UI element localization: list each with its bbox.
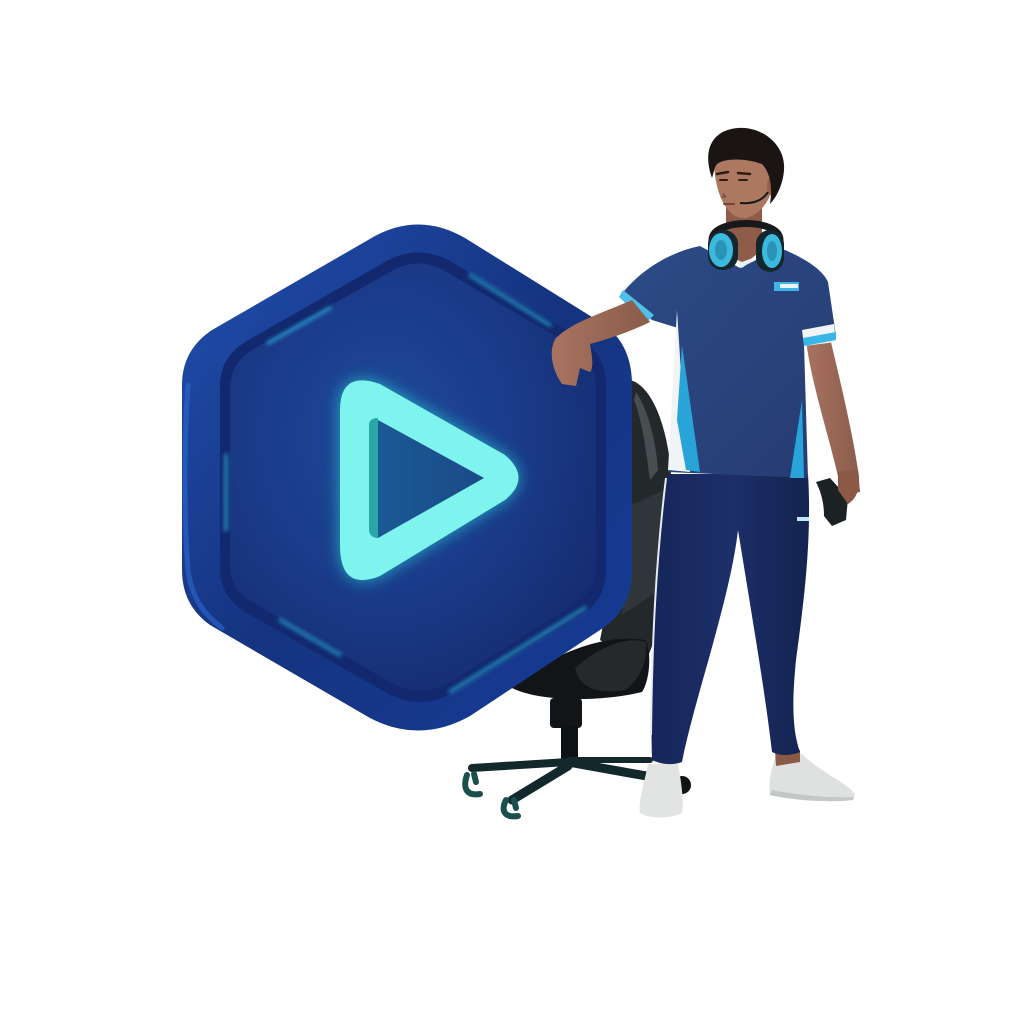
trousers [651,474,809,764]
back arm [806,338,860,496]
icon: play triangle [340,380,518,580]
chair backrest [600,380,671,668]
jersey side panels [668,310,690,472]
head [714,148,776,218]
badge inner face [230,263,596,691]
controller hand [838,470,859,504]
chair base and casters [472,760,680,800]
badge: hexagon play button [182,224,632,731]
ear [767,177,775,195]
game controller [816,478,848,526]
left shoe [640,764,683,818]
right shoe [769,754,855,801]
badge inner recess [220,252,606,702]
person: standing gamer [552,128,860,818]
headset mic [740,192,768,203]
badge edge highlights [226,275,585,692]
face features [717,172,750,204]
office chair [465,380,691,816]
chair seat [512,639,649,699]
ankles [775,750,800,766]
trouser logo [797,517,809,521]
jersey [620,246,836,478]
neck [726,200,762,266]
headphones [708,224,784,272]
collar [733,256,758,268]
hair [708,128,784,204]
jersey logo [774,282,799,291]
sleeve cuffs [619,290,654,323]
leaning arm and hand [552,300,650,386]
badge outer rim [182,224,632,731]
chair column [550,698,582,728]
